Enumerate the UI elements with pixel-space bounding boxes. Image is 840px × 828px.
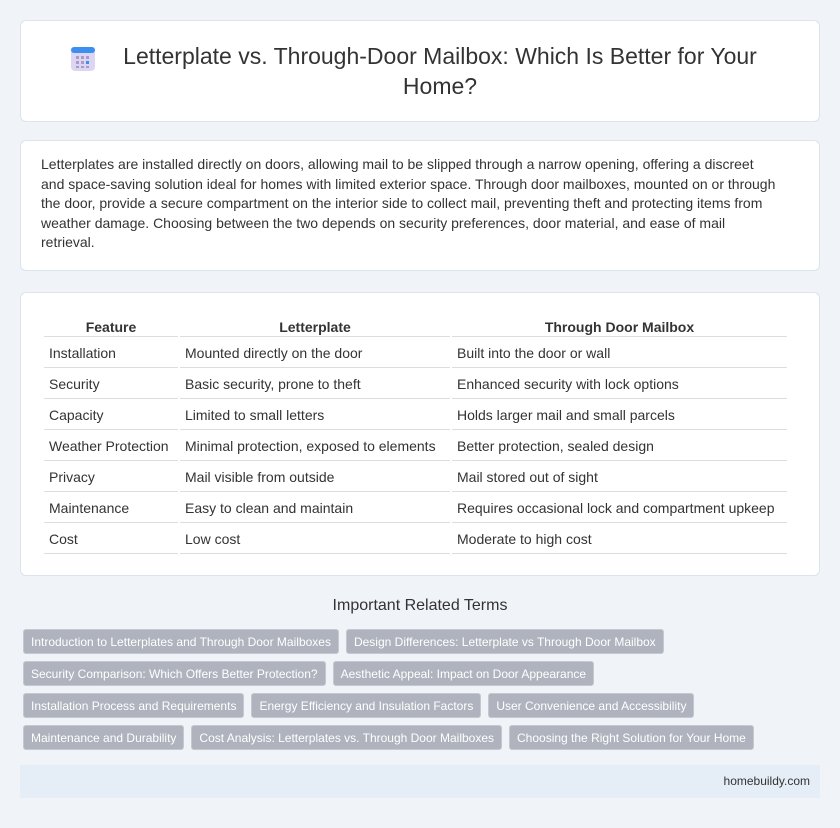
comparison table: Built into the door or wall [457, 345, 610, 361]
comparison table: Better protection, sealed design [457, 438, 654, 454]
comparison table: Letterplate [279, 319, 351, 335]
comparison table: Basic security, prone to theft [185, 376, 361, 392]
comparison table: Moderate to high cost [457, 531, 592, 547]
comparison table: Cost [49, 531, 78, 547]
related terms tags: Choosing the Right Solution for Your Home [517, 731, 746, 745]
icon: calendar [71, 47, 95, 71]
comparison table: Enhanced security with lock options [457, 376, 679, 392]
comparison table: Weather Protection [49, 438, 169, 454]
comparison table: Mail stored out of sight [457, 469, 598, 485]
title card [20, 20, 820, 122]
related terms tags [23, 629, 754, 750]
related terms tags: Design Differences: Letterplate vs Through Door Mailbox [354, 635, 656, 649]
footer: homebuildy.com [724, 774, 810, 788]
comparison table: Through Door Mailbox [545, 319, 694, 335]
footer [20, 765, 820, 798]
comparison table: Maintenance [49, 500, 129, 516]
comparison table: Minimal protection, exposed to elements [185, 438, 436, 454]
related terms heading: Important Related Terms [333, 597, 507, 614]
comparison table [20, 292, 820, 576]
related terms tags: Cost Analysis: Letterplates vs. Through Door Mailboxes [199, 731, 494, 745]
comparison table: Privacy [49, 469, 95, 485]
intro text: Letterplates are installed directly on doors, allowing mail to be slipped through a narrow opening, offering a discreet [41, 156, 754, 172]
comparison table: Mounted directly on the door [185, 345, 362, 361]
comparison table: Mail visible from outside [185, 469, 334, 485]
comparison table: Requires occasional lock and compartment upkeep [457, 500, 775, 516]
intro text: the door, provide a secure compartment on the interior side to collect mail, preventing theft and protecting items from [41, 195, 762, 211]
comparison table: Capacity [49, 407, 103, 423]
intro text: and space-saving solution ideal for homes with limited exterior space. Through door mailboxes, mounted on or through [41, 176, 775, 192]
related terms tags: Aesthetic Appeal: Impact on Door Appearance [341, 667, 586, 681]
related terms tags: Security Comparison: Which Offers Better Protection? [31, 667, 318, 681]
heading: Letterplate vs. Through-Door Mailbox: Which Is Better for Your Home? [123, 43, 757, 99]
comparison table: Holds larger mail and small parcels [457, 407, 675, 423]
comparison table: Feature [86, 319, 136, 335]
intro text [20, 140, 820, 271]
related terms tags: User Convenience and Accessibility [496, 699, 686, 713]
intro text: weather damage. Choosing between the two depends on security preferences, door material, and ease of mail [41, 214, 725, 230]
intro text: retrieval. [41, 234, 95, 250]
comparison table: Low cost [185, 531, 240, 547]
related terms tags: Introduction to Letterplates and Through Door Mailboxes [31, 635, 331, 649]
comparison table: Security [49, 376, 100, 392]
related terms tags: Energy Efficiency and Insulation Factors [259, 699, 473, 713]
comparison table: Limited to small letters [185, 407, 324, 423]
comparison table: Easy to clean and maintain [185, 500, 353, 516]
comparison table: Installation [49, 345, 116, 361]
related terms tags: Installation Process and Requirements [31, 699, 236, 713]
related terms tags: Maintenance and Durability [31, 731, 176, 745]
